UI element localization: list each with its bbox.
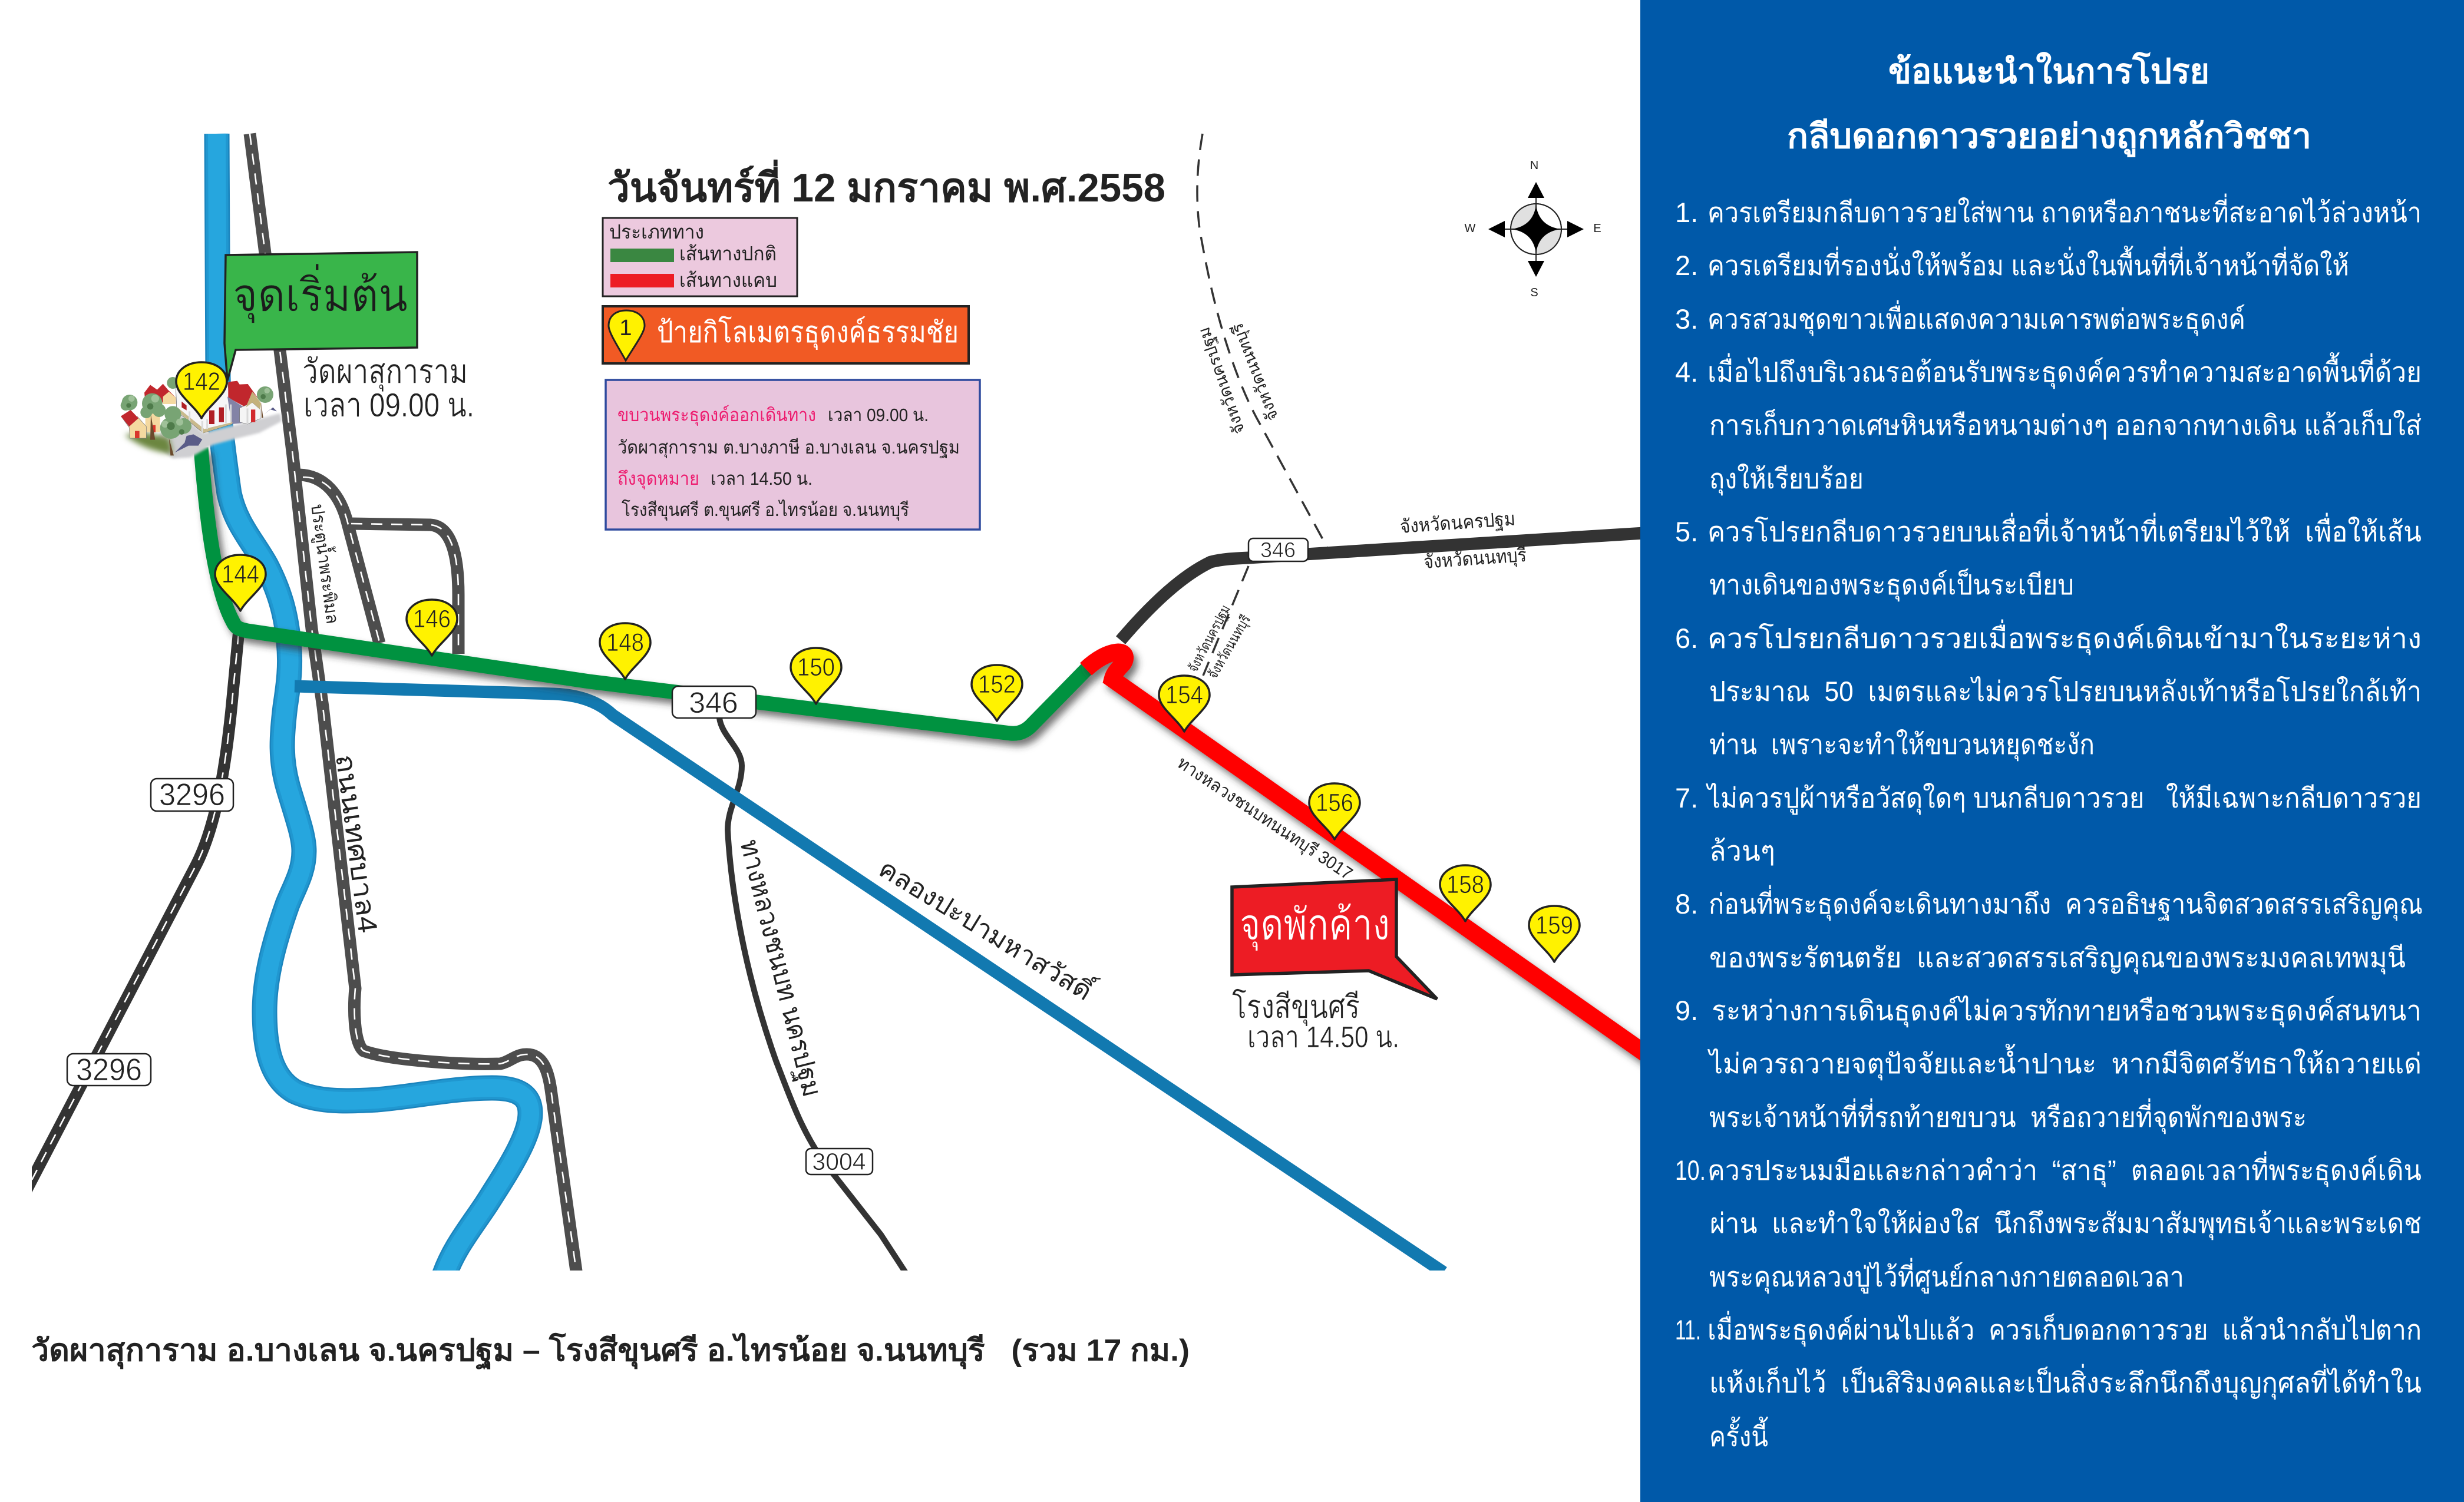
advice 11: 11. — [1675, 1314, 1701, 1345]
advice 9: ระหว่างการเดินธุดงค์ไม่ควรทักทายหรือชวนพระธุดงค์สนทนา — [1712, 995, 2422, 1028]
provincial boundary dashed south — [1203, 566, 1248, 676]
km marker 159: 159 — [1535, 911, 1573, 939]
advice 4: เมื่อไปถึงบริเวณรอต้อนรับพระธุดงค์ควรทำความสะอาดพื้นที่ด้วย — [1707, 352, 2422, 389]
km marker 142 — [176, 362, 227, 418]
km marker 156 — [1309, 783, 1360, 839]
advice 4 — [1675, 352, 2422, 496]
label: stop place and time — [1232, 988, 1399, 1054]
road plate 346 east — [1248, 538, 1308, 562]
advice 7 — [1675, 782, 2422, 866]
info box: schedule: ขบวนพระธุดงค์ออกเดินทาง — [617, 405, 816, 426]
km marker 146 — [407, 600, 457, 656]
temple illustration — [117, 365, 282, 459]
provincial boundary dashed north — [1197, 134, 1327, 548]
advice 3: ควรสวมชุดขาวเพื่อแสดงความเคารพต่อพระธุดงค์ — [1707, 300, 2245, 336]
compass: S — [1530, 286, 1538, 299]
advice 10: 10. — [1675, 1154, 1706, 1186]
km marker 142: 142 — [183, 368, 220, 396]
compass — [1465, 159, 1601, 299]
advice 3: 3. — [1675, 303, 1698, 335]
km marker 156: 156 — [1316, 789, 1353, 817]
label: start temple and time: เวลา 09.00 น. — [303, 386, 474, 424]
advice 11: ครั้งนี้ — [1709, 1417, 1768, 1452]
legend: route types: ประเภททาง — [609, 221, 704, 243]
info box: schedule: วัดผาสุการาม ต.บางภาษี อ.บางเลน จ.นครปฐม — [617, 437, 960, 459]
advice 1: ควรเตรียมกลีบดาวรวยใส่พาน ถาดหรือภาชนะที่สะอาดไว้ล่วงหน้า — [1707, 193, 2422, 228]
km marker 150: 150 — [797, 653, 835, 681]
road plate 346 east: 346 — [1260, 538, 1296, 562]
advice 8: ของพระรัตนตรัย และสวดสรรเสริญคุณของพระมงคลเทพมุนี — [1709, 942, 2406, 975]
advice 9: ไม่ควรถวายจตุปัจจัยและน้ำปานะ หากมีจิตศรัทธาให้ถวายแด่ — [1707, 1044, 2422, 1081]
advice 6: ประมาณ 50 เมตรและไม่ควรโปรยบนหลังเท้าหรือโปรยใกล้เท้า — [1709, 676, 2422, 707]
info box: schedule: โรงสีขุนศรี ต.ขุนศรี อ.ไทรน้อย จ.นนทบุรี — [622, 499, 909, 521]
km marker 150 — [791, 648, 841, 704]
advice 4: ถุงให้เรียบร้อย — [1709, 463, 1864, 496]
advice 6: 6. — [1675, 623, 1698, 654]
advice 10: พระคุณหลวงปู่ไว้ที่ศูนย์กลางกายตลอดเวลา — [1709, 1258, 2184, 1294]
road plate 3296 lower: 3296 — [76, 1053, 142, 1087]
advice 5: 5. — [1675, 516, 1698, 547]
km marker 159 — [1529, 906, 1580, 962]
province label nonthaburi east: จังหวัดนนทบุรี — [1423, 544, 1527, 574]
route: narrow red — [1086, 652, 1650, 1057]
road plate 3004: 3004 — [812, 1148, 866, 1175]
advice 7: 7. — [1675, 782, 1698, 813]
road: 3296 — [24, 633, 239, 1196]
label: stop place and time: โรงสีขุนศรี — [1232, 988, 1360, 1027]
province label nakhon pathom east: จังหวัดนครปฐม — [1399, 508, 1516, 538]
legend: route types: เส้นทางแคบ — [679, 269, 777, 291]
road: main highway — [250, 134, 577, 1275]
route: normal green — [201, 448, 1087, 733]
advice 8 — [1675, 885, 2423, 975]
advice 7: ล้วนๆ — [1709, 835, 1775, 866]
road label: thetsaban 4: ถนนเทศบาล4 — [330, 753, 384, 935]
road plate 346 main — [672, 686, 756, 719]
advice 10: ควรประนมมือและกล่าวคำว่า “สาธุ” ตลอดเวลาที่พระธุดงค์เดิน — [1707, 1151, 2422, 1187]
road label: phra phimon lock: ประตูน้ำพระพิมล — [306, 502, 345, 625]
province label nonthaburi north: จังหวัดนนทบุรี — [1228, 320, 1283, 424]
panel: advice — [1640, 0, 2464, 1502]
km marker 148 — [600, 623, 650, 679]
advice 2: 2. — [1675, 250, 1698, 281]
km marker 148: 148 — [606, 628, 644, 657]
route summary caption: วัดผาสุการาม อ.บางเลน จ.นครปฐม – โรงสีขุนศรี อ.ไทรน้อย จ.นนทบุรี (รวม 17 กม.) — [31, 1332, 1190, 1370]
advice 2: ควรเตรียมที่รองนั่งให้พร้อม และนั่งในพื้นที่ที่เจ้าหน้าที่จัดให้ — [1707, 246, 2349, 281]
km marker 146: 146 — [413, 605, 451, 633]
km marker 154 — [1159, 676, 1210, 732]
advice 9: 9. — [1675, 995, 1698, 1026]
title: date: วันจันทร์ที่ 12 มกราคม พ.ศ.2558 — [607, 159, 1165, 210]
advice 11 — [1675, 1311, 2422, 1452]
callout: start point: จุดเริ่มต้น — [233, 264, 408, 323]
province label nakhon pathom small: จังหวัดนครปฐม — [1185, 603, 1234, 675]
canal label: คลองปะปามหาสวัสดิ์ — [874, 850, 1102, 1007]
legend: route types: เส้นทางปกติ — [679, 243, 777, 264]
advice 9 — [1675, 995, 2422, 1134]
advice 4: 4. — [1675, 356, 1698, 388]
advice 8: 8. — [1675, 888, 1698, 919]
callout: overnight stop: จุดพักค้าง — [1240, 900, 1390, 951]
advice 7: ไม่ควรปูผ้าหรือวัสดุใดๆ บนกลีบดาวรวย ให้มีเฉพาะกลีบดาวรวย — [1705, 782, 2422, 815]
info box: schedule: เวลา 14.50 น. — [711, 468, 812, 489]
province label nakhon pathom north: จังหวัดนครปฐม — [1195, 325, 1249, 436]
road: branch one — [298, 475, 379, 643]
advice 4: การเก็บกวาดเศษหินหรือหนามต่างๆ ออกจากทางเดิน แล้วเก็บใส่ — [1709, 408, 2422, 441]
road label: 3017: ทางหลวงชนบทนนทบุรี 3017 — [1173, 753, 1356, 885]
panel heading: ข้อแนะนำในการโปรย — [1888, 51, 2209, 91]
panel heading: กลีบดอกดาวรวยอย่างถูกหลักวิชชา — [1787, 117, 2311, 157]
advice 5: ทางเดินของพระธุดงค์เป็นระเบียบ — [1709, 568, 2074, 602]
advice 1: 1. — [1675, 197, 1698, 228]
legend: route types — [603, 218, 797, 296]
label: start temple and time: วัดผาสุการาม — [302, 353, 468, 392]
compass: W — [1465, 222, 1476, 235]
houses — [144, 384, 176, 403]
label: stop place and time: เวลา 14.50 น. — [1247, 1020, 1399, 1054]
km marker 152: 152 — [978, 670, 1016, 699]
km marker 144 — [215, 555, 266, 611]
legend: km marker: 1 — [619, 316, 632, 340]
province label nonthaburi small: จังหวัดนนทบุรี — [1205, 612, 1254, 682]
advice 5 — [1675, 512, 2422, 602]
advice 10: ผ่าน และทำใจให้ผ่องใส นึกถึงพระสัมมาสัมพุทธเจ้าและพระเดช — [1710, 1207, 2422, 1240]
advice 11: แห้งเก็บไว้ เป็นสิริมงคลและเป็นสิ่งระลึกนึกถึงบุญกุศลที่ได้ทำใน — [1709, 1364, 2422, 1400]
advice 6: ควรโปรยกลีบดาวรวยเมื่อพระธุดงค์เดินเข้ามาในระยะห่าง — [1707, 619, 2422, 656]
info box: schedule: ถึงจุดหมาย — [617, 468, 699, 490]
legend: km marker — [603, 306, 969, 363]
km marker 158: 158 — [1446, 871, 1484, 899]
advice 10 — [1675, 1151, 2422, 1294]
map: river, roads and route — [24, 134, 1650, 1275]
advice 5: ควรโปรยกลีบดาวรวยบนเสื่อที่เจ้าหน้าที่เตรียมไว้ให้ เพื่อให้เส้น — [1707, 512, 2422, 547]
km marker 152 — [972, 665, 1022, 721]
callout: start point — [224, 252, 417, 381]
road: branch two — [351, 524, 458, 654]
advice 9: พระเจ้าหน้าที่ที่รถท้ายขบวน หรือถวายที่จุดพักของพระ — [1709, 1098, 2307, 1134]
temple hall — [176, 365, 232, 433]
road label: rural highway nakhon pathom: ทางหลวงชนบท นครปฐม — [733, 836, 828, 1100]
trees — [150, 402, 263, 455]
compass: E — [1593, 222, 1601, 235]
canal — [295, 686, 1444, 1272]
info box: schedule — [606, 380, 980, 530]
info box: schedule: เวลา 09.00 น. — [828, 405, 929, 425]
callout: overnight stop — [1232, 879, 1437, 999]
advice 6 — [1675, 619, 2422, 762]
advice 6: ท่าน เพราะจะทำให้ขบวนหยุดชะงัก — [1709, 729, 2095, 762]
road plate 346 main: 346 — [689, 686, 738, 719]
km marker 144: 144 — [222, 560, 259, 588]
river — [217, 134, 530, 1275]
km marker 158 — [1440, 865, 1491, 921]
legend: km marker: ป้ายกิโลเมตรธุดงค์ธรรมชัย — [657, 316, 959, 350]
compass: N — [1530, 159, 1538, 172]
panel heading — [1787, 51, 2311, 157]
km marker 154: 154 — [1165, 681, 1203, 709]
label: start temple and time — [302, 353, 474, 424]
road plate 3296 upper: 3296 — [159, 778, 225, 812]
road: 346 east — [1121, 533, 1644, 640]
road: 3004 — [719, 718, 907, 1275]
